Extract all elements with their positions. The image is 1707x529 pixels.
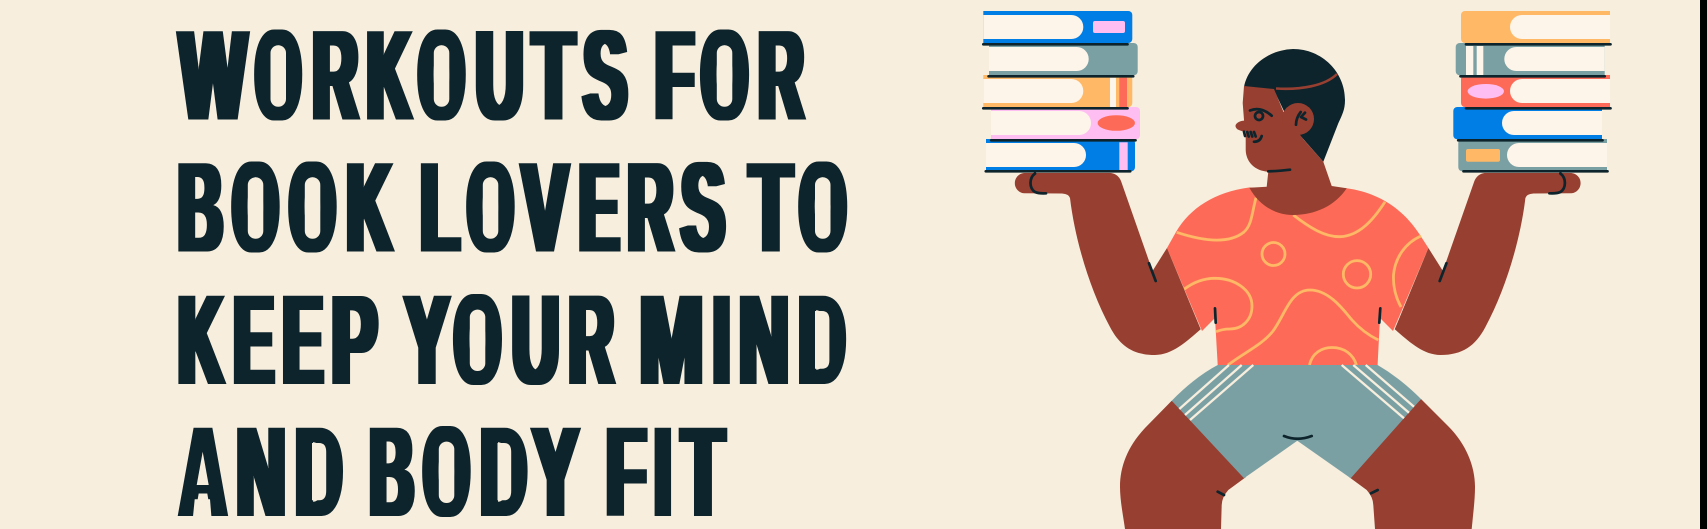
title: L bbox=[421, 137, 459, 280]
title bbox=[178, 5, 846, 529]
waist creases bbox=[1215, 308, 1380, 323]
book: blue bbox=[1453, 107, 1602, 139]
title: K bbox=[347, 137, 392, 280]
title: O bbox=[702, 5, 748, 148]
title: I bbox=[713, 269, 730, 412]
title: U bbox=[512, 269, 559, 412]
title: E bbox=[579, 137, 619, 280]
ear bbox=[1282, 103, 1314, 135]
shirt pattern bbox=[1177, 198, 1421, 365]
nose bbox=[1236, 120, 1256, 132]
title: O bbox=[468, 137, 513, 280]
book spine lines bbox=[1458, 44, 1610, 171]
title: W bbox=[180, 5, 246, 148]
book: orange bbox=[1461, 11, 1610, 43]
title: B bbox=[178, 137, 223, 280]
right arm and hand bbox=[1395, 173, 1581, 355]
book spine lines bbox=[983, 44, 1136, 171]
title: T bbox=[750, 137, 792, 280]
title: E bbox=[283, 269, 323, 412]
title: P bbox=[332, 269, 376, 412]
infographic canvas: O bbox=[800, 137, 846, 280]
illustration: person lifting books bbox=[983, 11, 1610, 529]
title: F bbox=[655, 5, 694, 148]
title: O bbox=[290, 137, 335, 280]
book: grey bbox=[989, 43, 1138, 75]
shirt bbox=[1167, 188, 1428, 365]
right book stack bbox=[1453, 11, 1610, 171]
title: O bbox=[419, 5, 464, 148]
title: R bbox=[569, 269, 614, 412]
title: S bbox=[681, 137, 725, 280]
title: M bbox=[640, 269, 703, 412]
title: T bbox=[533, 5, 574, 148]
title: R bbox=[758, 5, 804, 148]
book: orange bbox=[983, 75, 1132, 107]
title: S bbox=[584, 5, 627, 148]
book: pink bbox=[991, 107, 1140, 139]
face and neck bbox=[1243, 86, 1347, 215]
book: grey bbox=[1458, 139, 1607, 171]
left arm and hand bbox=[1015, 173, 1201, 355]
left leg bbox=[1120, 401, 1246, 529]
book: grey with stripes bbox=[1456, 43, 1605, 75]
title: O bbox=[233, 137, 278, 280]
title: E bbox=[234, 269, 274, 412]
title: N bbox=[739, 269, 789, 412]
hair bbox=[1244, 49, 1345, 162]
head bbox=[1236, 49, 1347, 215]
title: R bbox=[628, 137, 673, 280]
right leg bbox=[1349, 399, 1475, 529]
title: K bbox=[367, 5, 411, 148]
title: V bbox=[522, 137, 568, 280]
title: U bbox=[476, 5, 523, 148]
leg creases bbox=[1218, 490, 1378, 495]
title: D bbox=[799, 269, 845, 412]
hair stripe bbox=[1276, 74, 1337, 89]
book: blue bbox=[983, 11, 1132, 43]
title: R bbox=[313, 5, 358, 148]
title: O bbox=[256, 5, 301, 148]
shorts bbox=[1172, 365, 1421, 478]
book: blue with stripe bbox=[986, 139, 1135, 171]
face details bbox=[1244, 109, 1306, 171]
book: red bbox=[1461, 75, 1610, 107]
title letter counters bbox=[193, 45, 830, 517]
title: O bbox=[454, 269, 500, 412]
title: Y bbox=[405, 269, 449, 412]
left book stack bbox=[983, 11, 1140, 171]
title: K bbox=[178, 269, 223, 412]
